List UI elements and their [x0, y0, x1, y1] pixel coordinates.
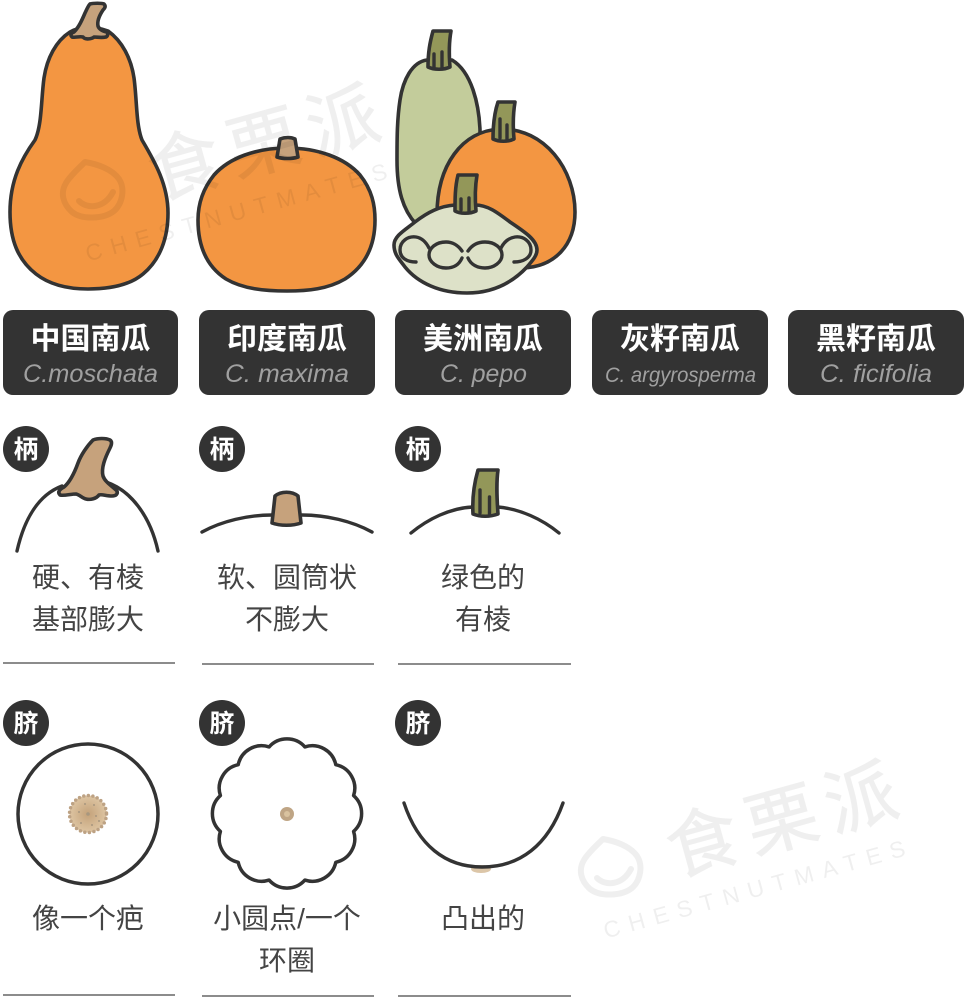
patty pan squash [394, 175, 537, 293]
watermark: bottom right [578, 749, 924, 943]
caption: 像一个疤 [32, 903, 144, 934]
navel illustration: scar [18, 744, 158, 884]
name label: 印度南瓜 [199, 310, 375, 395]
caption: 绿色的 [441, 562, 525, 593]
caption: 小圆点/一个 [213, 903, 361, 934]
caption: 基部膨大 [32, 604, 144, 635]
name label: 中国南瓜: C.moschata [23, 360, 158, 388]
badge: 柄 [395, 426, 441, 472]
caption: 不膨大 [245, 604, 329, 635]
pumpkin: C. moschata [10, 3, 168, 289]
badge: 脐: 脐 [405, 710, 431, 738]
stem illustration: green ridged [411, 470, 559, 533]
caption [213, 903, 361, 976]
name label: 中国南瓜: 中国南瓜 [30, 323, 150, 356]
watermark: bottom right: CHESTNUTMATES [600, 835, 908, 943]
stem panel: C. moschata [3, 426, 175, 663]
name label: 灰籽南瓜: C. argyrosperma [605, 364, 756, 387]
badge: 脐: 脐 [209, 710, 235, 738]
name label: 灰籽南瓜: 灰籽南瓜 [620, 323, 740, 356]
watermark: bottom right: 食栗派 [658, 749, 916, 891]
name label: 美洲南瓜: C. pepo [440, 360, 527, 388]
caption: 软、圆筒状 [217, 562, 357, 593]
badge: 脐 [395, 700, 441, 746]
caption: 环圈 [259, 945, 315, 976]
pumpkins: C. pepo group [394, 31, 575, 293]
watermark: top left: CHESTNUTMATES [82, 158, 390, 266]
green squash [397, 31, 480, 224]
badge: 柄: 柄 [405, 436, 431, 464]
pumpkin: C. maxima [198, 138, 375, 291]
caption: 凸出的 [441, 903, 525, 934]
name label: 中国南瓜 [3, 310, 178, 395]
name label: 美洲南瓜: 美洲南瓜 [423, 323, 543, 356]
badge: 脐: 脐 [13, 710, 39, 738]
name label: 黑籽南瓜: C. ficifolia [820, 360, 932, 388]
stem illustration: hard ridged [17, 438, 158, 551]
badge: 柄 [199, 426, 245, 472]
name label: 灰籽南瓜 [592, 310, 768, 395]
caption [32, 562, 144, 635]
navel panel: C. moschata [3, 700, 175, 995]
badge: 柄: 柄 [209, 436, 235, 464]
caption [217, 562, 357, 635]
navel illustration: small dot, scalloped [212, 739, 362, 888]
badge: 脐 [3, 700, 49, 746]
name label: 黑籽南瓜: 黑籽南瓜 [816, 323, 936, 356]
caption [441, 562, 525, 635]
name label: 印度南瓜: C. maxima [225, 360, 349, 388]
navel illustration: protruding [404, 803, 563, 873]
name label: 黑籽南瓜 [788, 310, 964, 395]
caption: 硬、有棱 [32, 562, 144, 593]
badge: 柄 [3, 426, 49, 472]
watermark: top left: 食栗派 [140, 72, 398, 214]
badge: 脐 [199, 700, 245, 746]
badge: 柄: 柄 [13, 436, 39, 464]
stem panel: C. maxima [199, 426, 374, 664]
caption: 有棱 [455, 604, 511, 635]
watermark: top left [60, 72, 406, 266]
stem panel: C. pepo [395, 426, 571, 664]
navel panel: C. pepo [395, 700, 571, 996]
orange pumpkin [437, 102, 575, 268]
navel panel: C. maxima [199, 700, 374, 996]
name label: 印度南瓜: 印度南瓜 [227, 323, 347, 356]
name label: 美洲南瓜 [395, 310, 571, 395]
stem illustration: soft cylinder [202, 492, 372, 532]
